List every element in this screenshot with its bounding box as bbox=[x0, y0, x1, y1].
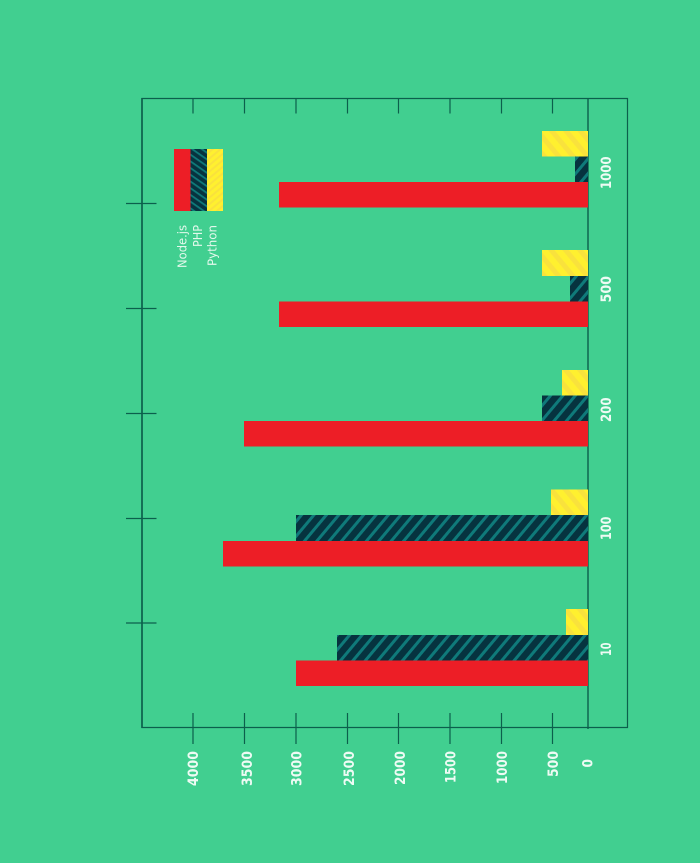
legend swatch: Node.js bbox=[174, 149, 190, 211]
legend bbox=[174, 149, 223, 268]
value axis labels: 0 bbox=[580, 759, 596, 768]
value axis labels: 2000 bbox=[393, 751, 409, 785]
bar group: 200 bbox=[244, 370, 588, 446]
category axis labels: 200 bbox=[599, 398, 615, 422]
legend label: Node.js: Node.js bbox=[176, 225, 190, 268]
legend swatch: PHP bbox=[190, 149, 207, 211]
value axis labels: 500 bbox=[546, 751, 562, 777]
category axis labels bbox=[599, 156, 615, 656]
category axis labels: 500 bbox=[599, 276, 615, 302]
chart frame and axes bbox=[126, 98, 628, 744]
category axis labels: 1000 bbox=[599, 156, 615, 189]
legend label: PHP: PHP bbox=[191, 225, 205, 247]
value axis labels: 4000 bbox=[186, 751, 202, 786]
value axis labels: 1500 bbox=[444, 751, 460, 783]
value axis labels: 2500 bbox=[342, 751, 358, 786]
category axis labels: 10 bbox=[599, 642, 615, 656]
bar group: 100 bbox=[223, 490, 588, 566]
value axis labels: 1000 bbox=[495, 751, 511, 784]
value axis labels: 3000 bbox=[290, 751, 306, 786]
bar group: 1000 bbox=[279, 131, 588, 208]
value axis labels: 3500 bbox=[240, 751, 256, 786]
bar group: 10 bbox=[296, 609, 588, 686]
category axis labels: 100 bbox=[599, 516, 615, 540]
legend swatch: Python bbox=[207, 149, 223, 211]
value axis labels bbox=[186, 751, 596, 786]
legend label: Python: Python bbox=[206, 225, 220, 266]
bar group: 500 bbox=[279, 250, 588, 327]
